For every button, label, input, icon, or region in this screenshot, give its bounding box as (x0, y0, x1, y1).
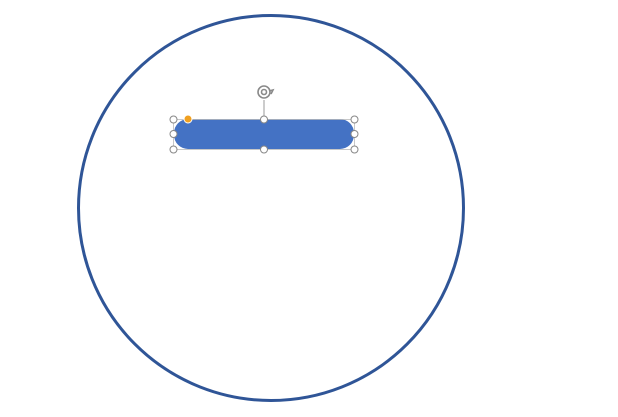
adjustment handle (184, 115, 192, 123)
selected rounded bar shape (170, 86, 358, 153)
rotation handle line (263, 100, 265, 119)
selection frame (174, 120, 354, 150)
bar fill (174, 119, 354, 149)
resize handles (170, 116, 358, 153)
icon: rotation handle (258, 86, 273, 98)
circle outline (78, 16, 464, 400)
